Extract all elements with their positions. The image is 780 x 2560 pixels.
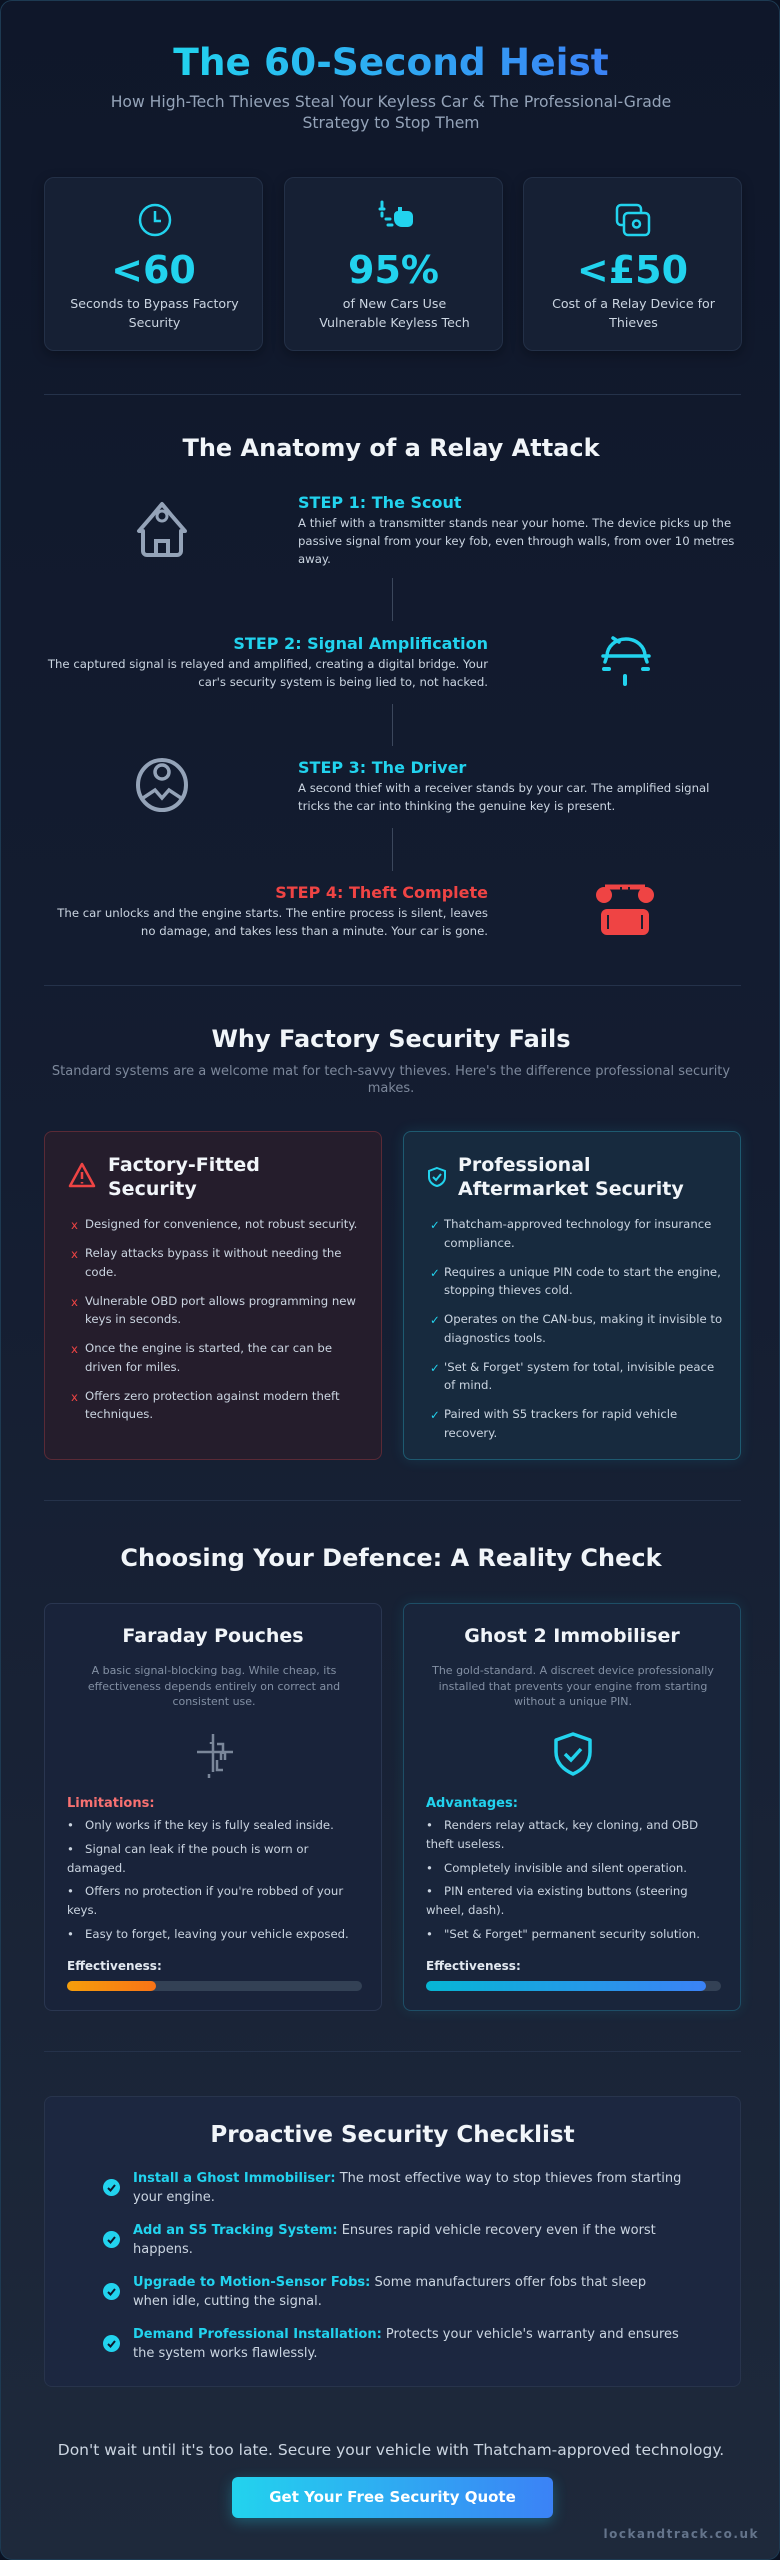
description: A basic signal-blocking bag. While cheap, its effectiveness depends entirely on correct and consistent use. bbox=[88, 1664, 340, 1708]
panel: professional aftermarket: ✓ bbox=[430, 1360, 440, 1374]
checklist items: Demand Professional Installation: Protects your vehicle's warranty and ensures the system works flawlessly. bbox=[133, 2327, 679, 2361]
heading: anatomy: The Anatomy of a Relay Attack bbox=[182, 434, 600, 462]
list: limitations: • Only works if the key is fully sealed inside. bbox=[67, 1818, 334, 1832]
number: 95% bbox=[348, 248, 439, 292]
panel title: Factory-Fitted bbox=[108, 1154, 260, 1176]
panel: faraday pouches bbox=[44, 1603, 382, 2011]
panel: professional aftermarket bbox=[403, 1131, 741, 1460]
step 3 bbox=[136, 758, 709, 813]
panel: factory-fitted: x bbox=[71, 1390, 78, 1404]
step text bbox=[48, 634, 488, 689]
icon: shield bbox=[428, 1166, 446, 1187]
panel: factory-fitted: x bbox=[71, 1218, 78, 1232]
panel title bbox=[458, 1154, 684, 1200]
step 4 bbox=[57, 883, 654, 938]
icon: warning bbox=[68, 1162, 96, 1188]
step 1 bbox=[136, 493, 734, 566]
list: flaws: Vulnerable OBD port allows programming new keys in seconds. bbox=[85, 1294, 356, 1326]
icon: keyless tech bbox=[378, 200, 413, 227]
effectiveness label: Effectiveness: bbox=[426, 1959, 521, 1973]
list: advantages: • PIN entered via existing buttons (steering wheel, dash). bbox=[426, 1884, 688, 1917]
subtitle: How High-Tech Thieves Steal Your Keyless Car & The Professional-Grade Strategy to Stop Them bbox=[111, 93, 671, 132]
bar: faraday effectiveness bbox=[67, 1981, 362, 1991]
label: Seconds to Bypass Factory Security bbox=[70, 296, 239, 330]
list: benefits: Requires a unique PIN code to start the engine, stopping thieves cold. bbox=[444, 1264, 721, 1297]
list: advantages bbox=[426, 1818, 700, 1940]
list: flaws bbox=[71, 1217, 357, 1421]
icon: device bbox=[616, 204, 650, 236]
description: The gold-standard. A discreet device professionally installed that prevents your engine from starting without a unique PIN. bbox=[432, 1664, 714, 1708]
icon: car bbox=[596, 884, 654, 935]
footer url: lockandtrack.co.uk bbox=[603, 2527, 759, 2541]
list: benefits bbox=[430, 1217, 722, 1440]
panel: professional aftermarket: ✓ bbox=[430, 1313, 440, 1327]
icon: amplifier dome bbox=[601, 636, 651, 686]
panel title: Ghost 2 Immobiliser bbox=[464, 1625, 680, 1647]
step text: A second thief with a receiver stands by your car. The amplified signal tricks the car into thinking the genuine key is present. bbox=[298, 781, 709, 813]
advantages heading: Advantages: bbox=[426, 1796, 518, 1811]
step text bbox=[298, 758, 709, 813]
stat card: 60 seconds bbox=[44, 177, 263, 351]
icon: shield check bbox=[554, 1732, 592, 1776]
step text: The car unlocks and the engine starts. The entire process is silent, leaves no damage, and takes less than a minute. Your car is gone. bbox=[57, 906, 488, 938]
panel: factory-fitted: x bbox=[71, 1294, 78, 1308]
panel: factory-fitted: x bbox=[71, 1342, 78, 1356]
step text: STEP 2: Signal Amplification bbox=[233, 634, 488, 653]
stat card: under £50 bbox=[523, 177, 742, 351]
checklist items: Add an S5 Tracking System: Ensures rapid vehicle recovery even if the worst happens. bbox=[133, 2223, 656, 2257]
step text bbox=[57, 883, 488, 938]
panel: professional aftermarket: ✓ bbox=[430, 1218, 440, 1232]
list: limitations: • Offers no protection if you're robbed of your keys. bbox=[67, 1884, 343, 1917]
checklist items: Upgrade to Motion-Sensor Fobs: Some manufacturers offer fobs that sleep bbox=[133, 2275, 646, 2290]
list: limitations: • Signal can leak if the pouch is worn or damaged. bbox=[67, 1842, 308, 1874]
list: benefits: Operates on the CAN-bus, making it invisible to diagnostics tools. bbox=[444, 1312, 722, 1344]
stat card: 95% bbox=[284, 177, 503, 351]
list: benefits: Thatcham-approved technology for insurance compliance. bbox=[444, 1217, 711, 1250]
heading: choosing your defence: Choosing Your Defence: A Reality Check bbox=[120, 1544, 662, 1572]
list: advantages: • Completely invisible and silent operation. bbox=[426, 1860, 687, 1874]
panel: factory-fitted: x bbox=[71, 1247, 78, 1261]
button: free quote: Get Your Free Security Quote bbox=[269, 2488, 516, 2506]
list: limitations bbox=[67, 1818, 349, 1940]
panel: professional aftermarket: ✓ bbox=[430, 1266, 440, 1280]
icon: driver bbox=[136, 758, 188, 812]
panel title: Aftermarket Security bbox=[458, 1178, 684, 1200]
checklist title: Proactive Security Checklist bbox=[210, 2122, 575, 2148]
label: Cost of a Relay Device for Thieves bbox=[552, 296, 715, 330]
panel: checklist bbox=[44, 2096, 741, 2387]
icon: house bbox=[136, 502, 187, 557]
list: limitations: • Easy to forget, leaving your vehicle exposed. bbox=[67, 1926, 349, 1940]
icon: pouch bbox=[197, 1734, 233, 1778]
heading: why factory fails: Why Factory Security Fails bbox=[211, 1025, 571, 1053]
list: flaws: Relay attacks bypass it without needing the code. bbox=[85, 1246, 342, 1278]
list: advantages: • "Set & Forget" permanent security solution. bbox=[426, 1926, 700, 1940]
panel title bbox=[108, 1154, 260, 1200]
step text bbox=[298, 493, 734, 566]
call to action text: Don't wait until it's too late. Secure your vehicle with Thatcham-approved technology. bbox=[58, 2441, 724, 2459]
panel title: Professional bbox=[458, 1154, 591, 1176]
step text: STEP 4: Theft Complete bbox=[275, 883, 488, 902]
list: benefits: Paired with S5 trackers for rapid vehicle recovery. bbox=[444, 1407, 677, 1440]
step text: STEP 3: The Driver bbox=[298, 758, 466, 777]
step 2 bbox=[48, 634, 651, 689]
list: benefits: 'Set & Forget' system for total, invisible peace of mind. bbox=[444, 1360, 714, 1392]
panel: factory-fitted bbox=[44, 1131, 382, 1460]
list: flaws: Once the engine is started, the car can be driven for miles. bbox=[85, 1341, 332, 1374]
number: <£50 bbox=[577, 248, 688, 292]
list: advantages: • Renders relay attack, key cloning, and OBD theft useless. bbox=[426, 1818, 698, 1851]
section intro: Standard systems are a welcome mat for tech-savvy thieves. Here's the difference professional security makes. bbox=[52, 1064, 730, 1096]
panel: ghost 2 immobiliser bbox=[403, 1603, 741, 2011]
step text: A thief with a transmitter stands near your home. The device picks up the passive signal from your key fob, even through walls, from over 10 metres away. bbox=[298, 516, 734, 566]
checklist items: when idle, cutting the signal. bbox=[133, 2294, 322, 2309]
number: <60 bbox=[111, 248, 196, 292]
icon: clock bbox=[138, 204, 172, 236]
step text: The captured signal is relayed and amplified, creating a digital bridge. Your car's security system is being lied to, not hacked. bbox=[48, 657, 488, 689]
checklist items: Install a Ghost Immobiliser: The most effective way to stop thieves from starting your engine. bbox=[133, 2171, 681, 2205]
label: of New Cars Use Vulnerable Keyless Tech bbox=[319, 296, 470, 330]
step text: STEP 1: The Scout bbox=[298, 493, 462, 512]
limitations heading: Limitations: bbox=[67, 1796, 155, 1811]
panel: professional aftermarket: ✓ bbox=[430, 1408, 440, 1422]
effectiveness label: Effectiveness: bbox=[67, 1959, 162, 1973]
title: The 60-Second Heist bbox=[173, 40, 609, 84]
panel title: Security bbox=[108, 1178, 197, 1200]
checklist items bbox=[103, 2171, 681, 2361]
list: flaws: Offers zero protection against modern theft techniques. bbox=[85, 1388, 340, 1421]
bar: ghost effectiveness bbox=[426, 1981, 721, 1991]
button: free quote bbox=[232, 2477, 553, 2518]
panel title: Faraday Pouches bbox=[122, 1625, 304, 1647]
list: flaws: Designed for convenience, not robust security. bbox=[85, 1217, 357, 1231]
